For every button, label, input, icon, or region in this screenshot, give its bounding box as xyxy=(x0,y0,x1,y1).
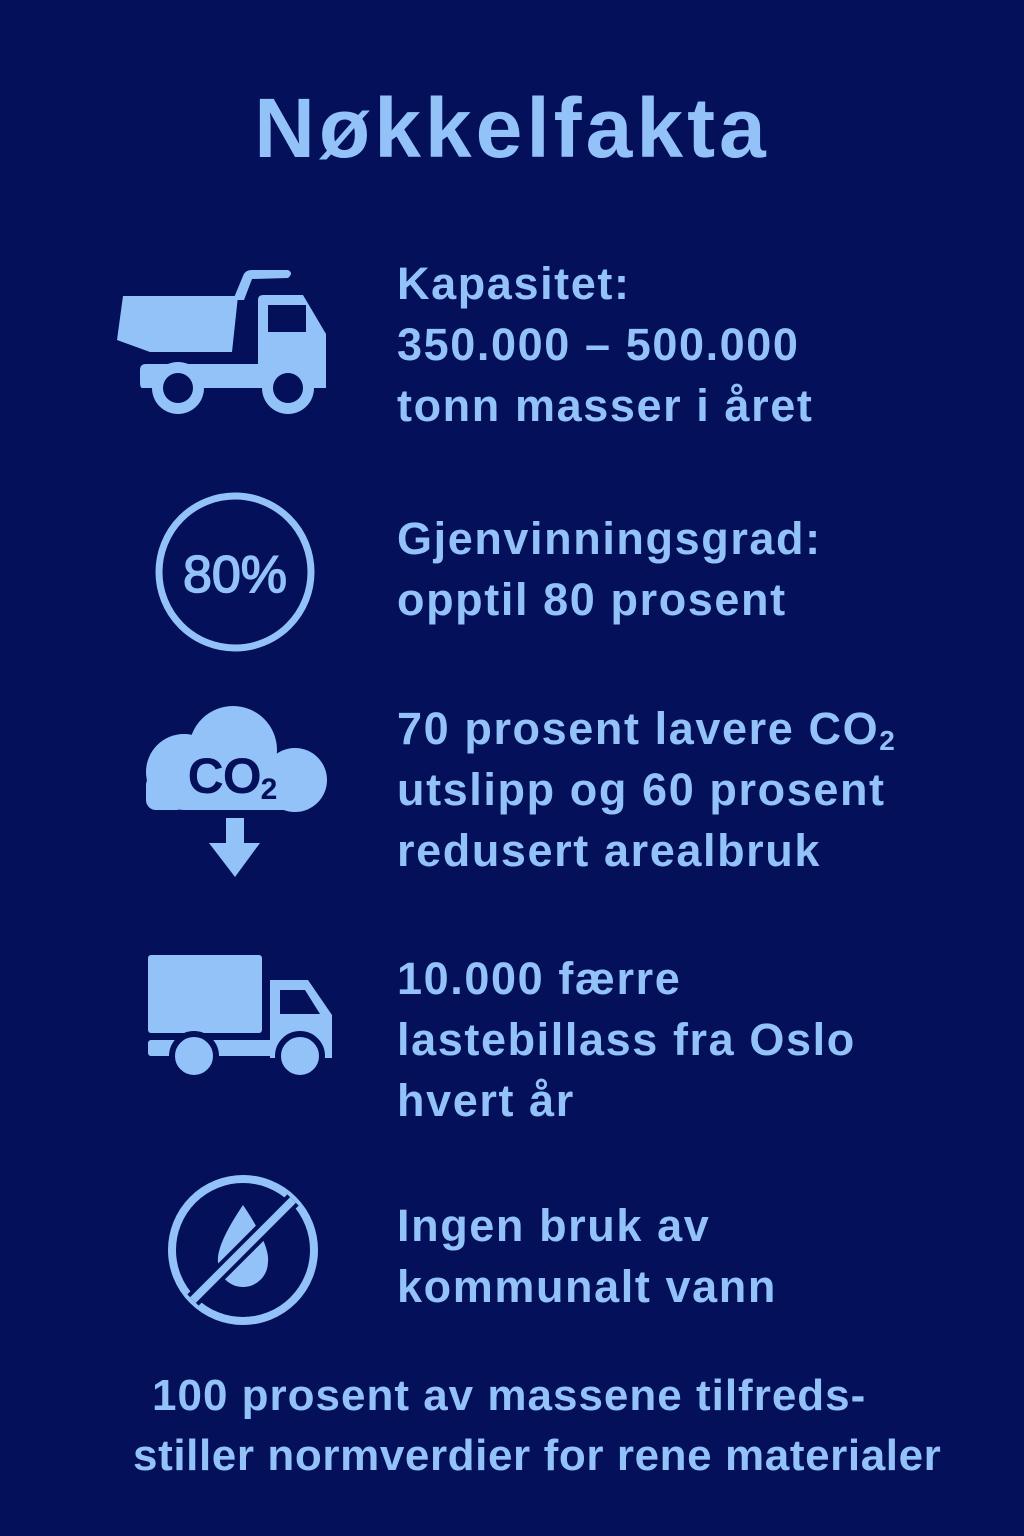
icon: CO2 cloud with arrow: 2 xyxy=(261,773,277,806)
icon: no water xyxy=(172,1179,314,1321)
text: recycling: Gjenvinningsgrad: xyxy=(397,513,822,564)
text: water: kommunalt vann xyxy=(397,1261,777,1312)
text: footer xyxy=(133,1371,941,1480)
text: capacity xyxy=(397,258,813,431)
icon: CO2 cloud with arrow: CO xyxy=(188,748,261,804)
icon: 80% circle: 80% xyxy=(183,546,287,604)
text: trucks xyxy=(397,953,856,1126)
text: capacity: 350.000 – 500.000 xyxy=(397,319,800,370)
text: CO2 xyxy=(397,703,896,876)
icon: dump truck xyxy=(117,270,326,414)
text: trucks: lastebillass fra Oslo xyxy=(397,1014,856,1065)
text: water: Ingen bruk av xyxy=(397,1200,710,1251)
text: footer: 100 prosent av massene tilfreds- xyxy=(152,1371,866,1420)
text: water xyxy=(397,1200,777,1312)
text: CO2: redusert arealbruk xyxy=(397,825,821,876)
text: capacity: tonn masser i året xyxy=(397,380,813,431)
icon: CO2 cloud with arrow xyxy=(146,706,327,877)
text: CO2: utslipp og 60 prosent xyxy=(397,764,886,815)
text: capacity: Kapasitet: xyxy=(397,258,631,309)
text: footer: stiller normverdier for rene materialer xyxy=(133,1431,941,1480)
icon: 80% circle xyxy=(159,496,311,648)
text: recycling xyxy=(397,513,822,625)
title: Nøkkelfakta xyxy=(254,81,770,175)
text: trucks: 10.000 færre xyxy=(397,953,681,1004)
icon: delivery truck xyxy=(148,955,332,1078)
text: recycling: opptil 80 prosent xyxy=(397,574,787,625)
text: CO2: 70 prosent lavere CO2 xyxy=(397,703,896,756)
text: trucks: hvert år xyxy=(397,1075,575,1126)
